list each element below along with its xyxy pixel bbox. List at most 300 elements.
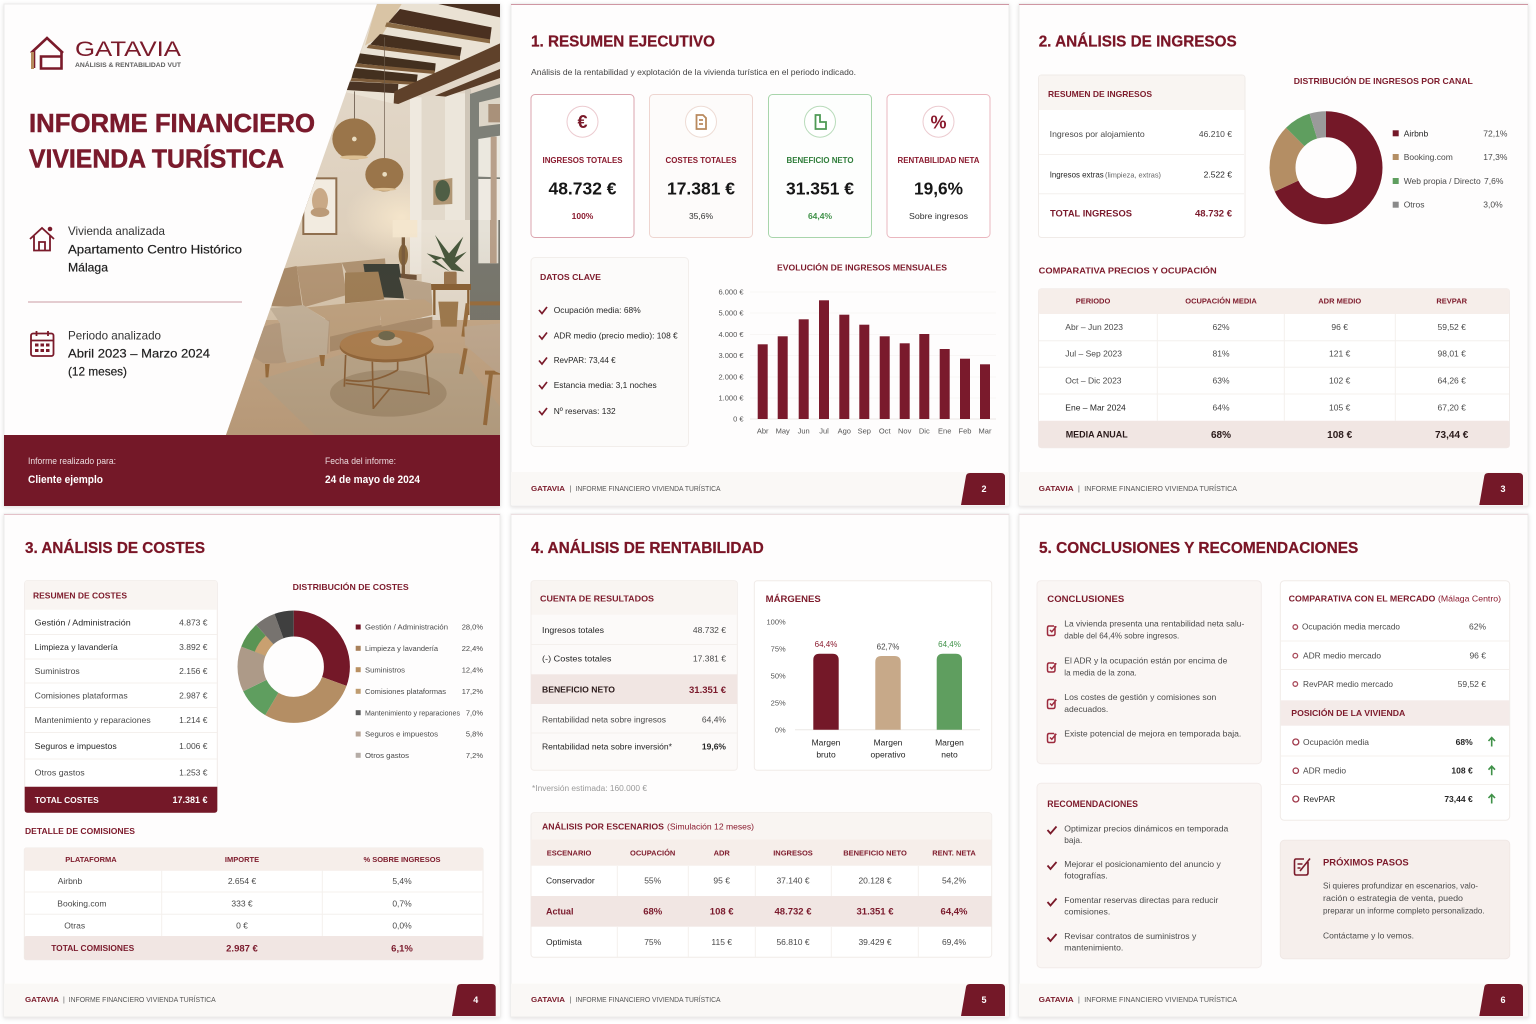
- band: posición de la vivienda: POSICIÓN DE LA VIVIENDA: [1291, 707, 1405, 718]
- legend: [1393, 128, 1508, 210]
- table: análisis por escenarios: 69,4%: [942, 937, 966, 947]
- footer: |: [1078, 486, 1080, 493]
- heading: 2. ANÁLISIS DE INGRESOS: [1039, 32, 1237, 51]
- next steps text: preparar un informe completo personalizado.: [1323, 905, 1485, 915]
- panel: comparativa con el mercado: 96 €: [1469, 651, 1486, 661]
- table: detalle de comisiones: [24, 848, 483, 960]
- icons: check marks: [1048, 826, 1056, 941]
- conclusions list: Existe potencial de mejora en temporada baja.: [1064, 729, 1241, 739]
- panel: datos clave: DATOS CLAVE: [540, 272, 601, 282]
- market icons: [1293, 625, 1298, 686]
- table: comparativa precios y ocupación: 105 €: [1329, 402, 1351, 412]
- card: rentabilidad neta: Sobre ingresos: [909, 211, 968, 221]
- table: comparativa precios y ocupación: 81%: [1212, 349, 1230, 359]
- table: comparativa precios y ocupación: 59,52 €: [1438, 322, 1466, 332]
- table: comparativa precios y ocupación: 108 €: [1327, 430, 1353, 441]
- card: ingresos totales: €: [577, 112, 588, 132]
- bar chart: evolución de ingresos mensuales: 6.000 €: [718, 288, 744, 296]
- legend: 7,6%: [1484, 176, 1504, 186]
- table: análisis por escenarios: 37.140 €: [776, 876, 810, 886]
- footer: |: [63, 997, 65, 1004]
- panel: comparativa con el mercado: RevPAR medio mercado: [1303, 679, 1393, 689]
- panel: resumen de costes: 4.873 €: [179, 618, 208, 628]
- table: comparativa precios y ocupación: 64,26 €: [1438, 376, 1466, 386]
- bar chart: evolución de ingresos mensuales: May: [776, 426, 790, 436]
- table: comparativa precios y ocupación: [1038, 289, 1510, 448]
- panel: resumen de costes: 1.253 €: [179, 767, 208, 777]
- card: costes totales: [650, 94, 752, 238]
- table: comparativa precios y ocupación: 73,44 €: [1435, 430, 1469, 441]
- panel: próximos pasos: [1280, 840, 1510, 959]
- panel: comparativa con el mercado: COMPARATIVA CON EL MERCADO: [1289, 593, 1436, 603]
- footer: [4, 984, 500, 1016]
- icon: receipt: [696, 115, 706, 129]
- panel: cuenta de resultados: (-) Costes totales: [542, 654, 612, 664]
- table: detalle de comisiones: 0,0%: [392, 920, 412, 930]
- bar chart: evolución de ingresos mensuales: 3.000 €: [718, 351, 744, 360]
- panel: comparativa con el mercado: (Málaga Centro): [1438, 593, 1501, 603]
- panel: resumen de ingresos: Ingresos por alojamiento: [1050, 129, 1145, 139]
- panel: cuenta de resultados: BENEFICIO NETO: [542, 684, 615, 694]
- card: rentabilidad neta: [887, 94, 990, 238]
- bar chart: márgenes: Margen: [874, 737, 903, 747]
- panel: resumen de costes: [25, 580, 217, 813]
- table: detalle de comisiones: IMPORTE: [225, 855, 259, 864]
- bar chart: márgenes: 0%: [775, 725, 786, 734]
- footer: |: [570, 486, 572, 493]
- table: análisis por escenarios: 95 €: [713, 876, 730, 886]
- cover footer band: Cliente ejemplo: [28, 474, 103, 486]
- panel: comparativa con el mercado: [1280, 581, 1510, 820]
- conclusions list: adecuados.: [1064, 704, 1108, 714]
- bar chart: márgenes: 50%: [771, 671, 786, 680]
- cover footer band: [4, 435, 500, 506]
- property details: Málaga: [68, 260, 108, 274]
- panel: resumen de costes: Limpieza y lavandería: [35, 642, 118, 652]
- panel: page 3 análisis de ingresos: [1019, 4, 1528, 506]
- table: análisis por escenarios: 55%: [644, 876, 662, 886]
- conclusions list: la media de la zona.: [1064, 667, 1137, 677]
- bar chart: evolución de ingresos mensuales: EVOLUCIÓN DE INGRESOS MENSUALES: [777, 262, 947, 272]
- panel: resumen de costes: Seguros e impuestos: [35, 741, 117, 751]
- bar chart: evolución de ingresos mensuales: 0 €: [733, 414, 744, 424]
- legend: 28,0%: [462, 623, 483, 632]
- panel: resumen de costes: Comisiones plataformas: [35, 690, 128, 700]
- table: análisis por escenarios: OCUPACIÓN: [630, 848, 675, 858]
- intro text: Análisis de la rentabilidad y explotación de la vivienda turística en el periodo indicado.: [531, 67, 856, 77]
- table: análisis por escenarios: [531, 813, 992, 957]
- panel: resumen de costes: Mantenimiento y reparaciones: [35, 715, 151, 725]
- footer: GATAVIA: [1039, 484, 1074, 493]
- panel: comparativa con el mercado: Ocupación media mercado: [1302, 622, 1400, 632]
- table: análisis por escenarios: 64,4%: [941, 907, 968, 918]
- footer: |: [570, 997, 572, 1004]
- table: comparativa precios y ocupación: 102 €: [1329, 376, 1351, 386]
- panel: conclusiones: CONCLUSIONES: [1047, 594, 1124, 604]
- title: VIVIENDA TURÍSTICA: [29, 144, 284, 174]
- bar chart: evolución de ingresos mensuales: 4.000 €: [718, 330, 744, 339]
- table heading: COMPARATIVA PRECIOS Y OCUPACIÓN: [1039, 265, 1217, 276]
- panel: resumen de ingresos: 46.210 €: [1199, 129, 1232, 139]
- legend: 12,4%: [462, 666, 483, 674]
- bar chart: márgenes: bruto: [816, 749, 836, 759]
- bar chart: evolución de ingresos mensuales: Feb: [959, 426, 971, 436]
- footer: 4: [473, 995, 478, 1005]
- legend: 72,1%: [1483, 128, 1508, 138]
- footnote: *Inversión estimada: 160.000 €: [532, 784, 648, 793]
- panel: resumen de ingresos: TOTAL INGRESOS: [1050, 208, 1132, 220]
- icon: edit note: [1294, 858, 1310, 875]
- card: beneficio neto: 64,4%: [808, 211, 832, 221]
- footer: [511, 472, 1009, 505]
- card: rentabilidad neta: RENTABILIDAD NETA: [898, 156, 980, 165]
- bar chart: evolución de ingresos mensuales: Sep: [858, 426, 871, 436]
- footer: GATAVIA: [531, 484, 566, 493]
- table: análisis por escenarios: 20.128 €: [858, 876, 892, 886]
- table: detalle de comisiones: Booking.com: [57, 898, 106, 908]
- legend: [356, 623, 483, 760]
- panel: comparativa con el mercado: Ocupación media: [1303, 737, 1369, 747]
- legend: Gestión / Administración: [365, 623, 448, 632]
- recommendations list: Mejorar el posicionamiento del anuncio y: [1064, 859, 1222, 869]
- bar chart: evolución de ingresos mensuales: Mar: [979, 426, 992, 436]
- bar chart: márgenes: 62,7%: [877, 642, 899, 651]
- panel: resumen de ingresos: 48.732 €: [1195, 208, 1233, 220]
- table: análisis por escenarios: 108 €: [710, 907, 734, 918]
- footer: GATAVIA: [25, 995, 60, 1004]
- panel: datos clave: RevPAR: 73,44 €: [554, 355, 616, 365]
- panel: comparativa con el mercado: 62%: [1469, 622, 1486, 632]
- conclusions list: dable del 64,4% sobre ingresos.: [1064, 631, 1179, 641]
- cover photo: living room: [220, 4, 505, 437]
- next steps text: Contáctame y lo vemos.: [1323, 931, 1414, 941]
- period details: Abril 2023 – Marzo 2024: [68, 346, 210, 360]
- heading: 5. CONCLUSIONES Y RECOMENDACIONES: [1039, 540, 1359, 557]
- table: comparativa precios y ocupación: 64%: [1212, 402, 1230, 412]
- bar chart: evolución de ingresos mensuales: Ago: [838, 426, 851, 436]
- title: [29, 108, 315, 174]
- footer: GATAVIA: [531, 995, 566, 1004]
- panel: comparativa con el mercado: 73,44 €: [1444, 794, 1473, 804]
- legend: Booking.com: [1404, 152, 1453, 162]
- recommendations list: Optimizar precios dinámicos en temporada: [1064, 823, 1229, 833]
- table: comparativa precios y ocupación: ADR MEDIO: [1318, 297, 1361, 306]
- footer: [511, 984, 1009, 1016]
- legend: Suministros: [365, 666, 405, 674]
- panel: resumen de ingresos: Ingresos extras: [1050, 170, 1104, 180]
- bar chart: márgenes: Margen: [812, 737, 841, 747]
- brand name: GATAVIA: [75, 38, 181, 61]
- legend: Airbnb: [1404, 128, 1429, 138]
- panel: resumen de costes: Gestión / Administración: [35, 618, 131, 628]
- panel: resumen de costes: 1.006 €: [179, 741, 208, 751]
- table: comparativa precios y ocupación: Abr – Jun 2023: [1065, 322, 1123, 332]
- table: análisis por escenarios: BENEFICIO NETO: [843, 848, 907, 858]
- bar chart: márgenes: Margen: [935, 737, 964, 747]
- panel: datos clave: ADR medio (precio medio): 108 €: [554, 330, 678, 340]
- table: análisis por escenarios: 68%: [643, 907, 663, 918]
- panel: datos clave: Estancia media: 3,1 noches: [554, 380, 657, 390]
- panel: resumen de ingresos: (limpieza, extras): [1105, 172, 1161, 180]
- position icons: [1293, 739, 1299, 802]
- table: comparativa precios y ocupación: MEDIA ANUAL: [1066, 430, 1128, 440]
- panel: resumen de ingresos: 2.522 €: [1204, 170, 1232, 180]
- table: análisis por escenarios: ADR: [714, 848, 730, 858]
- bar chart: evolución de ingresos mensuales: Ene: [938, 426, 951, 436]
- heading: 3. ANÁLISIS DE COSTES: [25, 538, 205, 557]
- heading: 4. ANÁLISIS DE RENTABILIDAD: [531, 538, 764, 557]
- period details: (12 meses): [68, 364, 127, 378]
- bar chart: márgenes: 64,4%: [938, 640, 961, 649]
- bar chart: evolución de ingresos mensuales: Jul: [819, 426, 829, 436]
- panel: resumen de costes: 3.892 €: [179, 642, 208, 652]
- bar chart: evolución de ingresos mensuales: Nov: [898, 426, 912, 436]
- total row: [25, 787, 217, 813]
- panel: page 5 análisis de rentabilidad: [511, 514, 1009, 1017]
- table: detalle de comisiones: % SOBRE INGRESOS: [363, 855, 441, 864]
- bar chart: evolución de ingresos mensuales: Dic: [919, 426, 930, 436]
- donut chart: ingresos por canal: DISTRIBUCIÓN DE INGRESOS POR CANAL: [1294, 75, 1473, 86]
- table: análisis por escenarios: 75%: [644, 937, 662, 947]
- logo: [31, 38, 181, 69]
- icons: up arrows: [1488, 738, 1495, 804]
- table: detalle de comisiones: Airbnb: [58, 876, 83, 886]
- panel: resumen de costes: 2.156 €: [179, 666, 208, 676]
- legend: 5,8%: [466, 730, 483, 739]
- next steps text: [1323, 881, 1485, 941]
- panel: cuenta de resultados: CUENTA DE RESULTADOS: [540, 594, 654, 604]
- footer: 5: [981, 995, 987, 1005]
- footer: INFORME FINANCIERO VIVIENDA TURÍSTICA: [1084, 484, 1237, 493]
- table: detalle de comisiones: 5,4%: [392, 876, 412, 886]
- table: comparativa precios y ocupación: Jul – Sep 2023: [1065, 349, 1122, 359]
- legend: Mantenimiento y reparaciones: [365, 708, 460, 718]
- panel: comparativa con el mercado: 68%: [1456, 737, 1473, 747]
- table: análisis por escenarios: (Simulación 12 meses): [667, 821, 754, 831]
- bar chart: evolución de ingresos mensuales: 5.000 €: [718, 308, 744, 318]
- table: comparativa precios y ocupación: 68%: [1211, 430, 1231, 441]
- card: ingresos totales: [531, 94, 634, 238]
- panel: resumen de costes: Suministros: [35, 666, 80, 676]
- table: comparativa precios y ocupación: 62%: [1212, 322, 1230, 332]
- next steps text: ración o estrategia de venta, puedo: [1323, 893, 1463, 903]
- panel: cuenta de resultados: Rentabilidad neta sobre ingresos: [542, 715, 666, 725]
- icon: document: [816, 115, 826, 129]
- table: análisis por escenarios: 39.429 €: [858, 937, 892, 947]
- card: ingresos totales: INGRESOS TOTALES: [542, 156, 623, 165]
- bar chart: márgenes: [754, 581, 992, 770]
- heading: 1. RESUMEN EJECUTIVO: [531, 34, 715, 51]
- cover footer band: Informe realizado para:: [28, 456, 116, 466]
- icon: home: [30, 228, 54, 250]
- panel: cuenta de resultados: 48.732 €: [693, 625, 726, 635]
- footer: 3: [1500, 484, 1506, 494]
- legend: Seguros e impuestos: [365, 730, 438, 739]
- donut chart: ingresos por canal: [1282, 75, 1508, 211]
- table: análisis por escenarios: Optimista: [546, 937, 582, 947]
- panel: recomendaciones: RECOMENDACIONES: [1047, 799, 1138, 809]
- bar chart: márgenes: operativo: [871, 749, 906, 759]
- table: detalle de comisiones: Otras: [64, 920, 85, 930]
- table: análisis por escenarios: 48.732 €: [775, 907, 812, 918]
- panel: page 6 conclusiones y recomendaciones: [1019, 514, 1528, 1017]
- card: rentabilidad neta: 19,6%: [914, 178, 963, 198]
- title: INFORME FINANCIERO: [29, 108, 315, 138]
- card: beneficio neto: BENEFICIO NETO: [786, 156, 854, 165]
- legend: 17,2%: [462, 687, 483, 696]
- recommendations list: mantenimiento.: [1064, 943, 1123, 953]
- table: detalle de comisiones: 333 €: [231, 898, 253, 908]
- panel: cuenta de resultados: 17.381 €: [693, 654, 726, 664]
- next steps text: Si quieres profundizar en escenarios, valo-: [1323, 881, 1478, 891]
- bar chart: evolución de ingresos mensuales: Oct: [879, 426, 891, 436]
- footer: |: [1078, 997, 1080, 1004]
- panel: datos clave: Nº reservas: 132: [554, 406, 616, 416]
- panel: recomendaciones: [1037, 783, 1261, 968]
- panel: page 2 resumen ejecutivo: [511, 4, 1009, 506]
- panel: page 4 análisis de costes: [4, 514, 500, 1017]
- bar chart: evolución de ingresos mensuales: 2.000 €: [718, 372, 744, 382]
- recommendations list: Revisar contratos de suministros y: [1064, 931, 1197, 941]
- footer: INFORME FINANCIERO VIVIENDA TURÍSTICA: [1084, 995, 1237, 1004]
- footer: INFORME FINANCIERO VIVIENDA TURÍSTICA: [69, 995, 216, 1004]
- table: análisis por escenarios: Actual: [546, 907, 574, 917]
- footer: INFORME FINANCIERO VIVIENDA TURÍSTICA: [576, 484, 721, 493]
- donut chart: distribución de costes: [250, 581, 483, 760]
- conclusions list: El ADR y la ocupación están por encima de: [1064, 655, 1228, 665]
- panel: cuenta de resultados: 64,4%: [702, 715, 726, 725]
- panel: conclusiones: [1037, 581, 1261, 764]
- recommendations list: Fomentar reservas directas para reducir: [1064, 895, 1218, 905]
- panel: cuenta de resultados: Rentabilidad neta sobre inversión*: [542, 741, 673, 751]
- panel: comparativa con el mercado: 59,52 €: [1458, 679, 1486, 689]
- table: detalle de comisiones: 2.987 €: [226, 944, 259, 954]
- band: posición de la vivienda: [1281, 700, 1509, 726]
- footer: 2: [981, 484, 987, 494]
- panel: resumen de ingresos: RESUMEN DE INGRESOS: [1048, 89, 1152, 99]
- total row: 17.381 €: [172, 795, 208, 805]
- table: comparativa precios y ocupación: REVPAR: [1436, 297, 1468, 306]
- period details: Periodo analizado: [68, 328, 161, 342]
- conclusions list: [1064, 619, 1244, 739]
- table: análisis por escenarios: 31.351 €: [857, 907, 894, 918]
- bar chart: márgenes: MÁRGENES: [766, 594, 821, 604]
- panel: cuenta de resultados: 19,6%: [702, 741, 726, 751]
- icons: checked boxes: [1048, 626, 1056, 742]
- conclusions list: La vivienda presenta una rentabilidad neta salu-: [1064, 619, 1244, 629]
- table: detalle de comisiones: TOTAL COMISIONES: [51, 943, 135, 953]
- footer: INFORME FINANCIERO VIVIENDA TURÍSTICA: [576, 995, 721, 1004]
- table: comparativa precios y ocupación: Ene – Mar 2024: [1065, 402, 1126, 412]
- bar chart: márgenes: 75%: [771, 644, 786, 653]
- property details: [68, 224, 242, 274]
- table: detalle de comisiones: 2.654 €: [228, 876, 256, 886]
- table: análisis por escenarios: INGRESOS: [773, 848, 813, 858]
- table: análisis por escenarios: 54,2%: [942, 876, 966, 886]
- cover footer band: 24 de mayo de 2024: [325, 474, 421, 486]
- recommendations list: baja.: [1064, 835, 1082, 845]
- table: análisis por escenarios: ANÁLISIS POR ESCENARIOS: [542, 821, 664, 831]
- card: costes totales: 17.381 €: [667, 178, 735, 198]
- total row: TOTAL COSTES: [35, 795, 99, 805]
- card: rentabilidad neta: %: [930, 112, 947, 132]
- panel: cuenta de resultados: 31.351 €: [689, 685, 727, 696]
- legend: 22,4%: [462, 644, 483, 653]
- panel: comparativa con el mercado: RevPAR: [1303, 794, 1335, 804]
- table: comparativa precios y ocupación: OCUPACIÓN MEDIA: [1185, 297, 1257, 306]
- panel: resumen de ingresos: [1038, 75, 1245, 238]
- panel: cuenta de resultados: [531, 581, 737, 770]
- panel: resumen de costes: 1.214 €: [179, 715, 208, 725]
- footer: [1019, 472, 1528, 505]
- bar chart: evolución de ingresos mensuales: Jun: [798, 426, 810, 436]
- legend: Otros: [1404, 200, 1424, 210]
- panel: resumen de costes: 2.987 €: [179, 690, 208, 700]
- footer: 6: [1500, 995, 1506, 1005]
- period details: [68, 328, 210, 378]
- bar chart: evolución de ingresos mensuales: Abr: [757, 426, 769, 436]
- legend: Limpieza y lavandería: [365, 644, 439, 653]
- brand tagline: ANÁLISIS & RENTABILIDAD VUT: [75, 60, 181, 69]
- table heading: DETALLE DE COMISIONES: [25, 826, 135, 836]
- table: comparativa precios y ocupación: 121 €: [1329, 349, 1351, 359]
- footer: GATAVIA: [1039, 995, 1074, 1004]
- legend: Comisiones plataformas: [365, 687, 446, 696]
- icon: house logo: [31, 38, 63, 69]
- panel: cover page: [4, 4, 505, 506]
- panel: próximos pasos: PRÓXIMOS PASOS: [1323, 856, 1409, 868]
- panel: resumen de costes: RESUMEN DE COSTES: [33, 590, 127, 600]
- table: análisis por escenarios: ESCENARIO: [547, 848, 591, 858]
- property details: Apartamento Centro Histórico: [68, 242, 242, 256]
- table: análisis por escenarios: 56.810 €: [776, 937, 810, 947]
- table: detalle de comisiones: 6,1%: [391, 944, 413, 954]
- conclusions list: Los costes de gestión y comisiones son: [1064, 692, 1217, 702]
- legend: 7,0%: [466, 708, 483, 718]
- bar chart: márgenes: 25%: [771, 698, 786, 707]
- legend: Web propia / Directo: [1404, 176, 1481, 186]
- table: detalle de comisiones: 0 €: [236, 920, 248, 930]
- table: análisis por escenarios: Conservador: [546, 876, 595, 886]
- table: comparativa precios y ocupación: 67,20 €: [1438, 402, 1466, 412]
- bar chart: márgenes: neto: [941, 749, 958, 759]
- cover footer band: Fecha del informe:: [325, 456, 396, 466]
- footer: [1019, 984, 1528, 1016]
- legend: 7,2%: [466, 751, 483, 760]
- recommendations list: comisiones.: [1064, 907, 1110, 917]
- panel: comparativa con el mercado: ADR medio: [1303, 766, 1346, 776]
- bar chart: evolución de ingresos mensuales: [718, 262, 996, 436]
- legend: 3,0%: [1483, 200, 1503, 210]
- card: costes totales: 35,6%: [689, 211, 713, 221]
- panel: cuenta de resultados: Ingresos totales: [542, 625, 604, 635]
- bar chart: márgenes: 64,4%: [815, 640, 837, 649]
- card: beneficio neto: [768, 94, 872, 238]
- table: comparativa precios y ocupación: 63%: [1212, 376, 1230, 386]
- panel: comparativa con el mercado: ADR medio mercado: [1303, 651, 1381, 661]
- panel: comparativa con el mercado: 108 €: [1451, 766, 1473, 776]
- card: ingresos totales: 100%: [572, 211, 594, 221]
- table: comparativa precios y ocupación: PERIODO: [1076, 297, 1110, 306]
- card: ingresos totales: 48.732 €: [548, 178, 617, 198]
- table: análisis por escenarios: 115 €: [711, 937, 732, 947]
- panel: datos clave: Ocupación media: 68%: [554, 305, 641, 315]
- table: comparativa precios y ocupación: 98,01 €: [1438, 349, 1466, 359]
- donut chart: distribución de costes: DISTRIBUCIÓN DE COSTES: [293, 581, 409, 592]
- property details: Vivienda analizada: [68, 224, 165, 238]
- table: análisis por escenarios: RENT. NETA: [932, 848, 976, 858]
- table: comparativa precios y ocupación: Oct – Dic 2023: [1065, 376, 1122, 386]
